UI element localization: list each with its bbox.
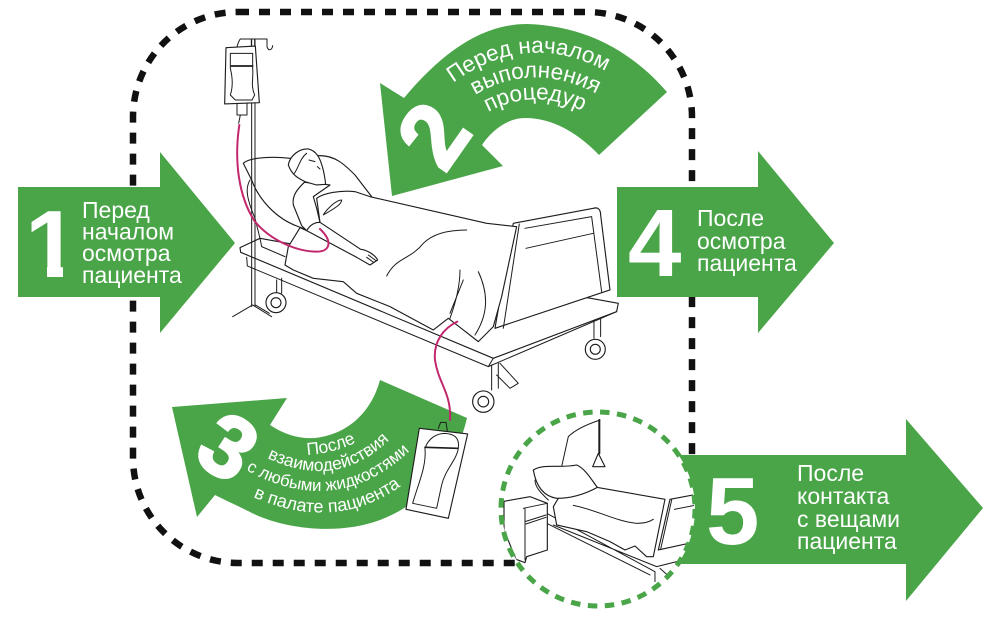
drainage bag [406,422,468,518]
urine tube [435,322,457,420]
arrow 3: after contact with body fluids: с любыми жидкостями [248,445,409,491]
label 5: с вещами [797,506,900,532]
IV pole [252,40,255,307]
pillow and headrest [243,156,372,238]
footboard [495,208,610,328]
number 2: 2 [377,85,490,186]
label 5: пациента [797,528,897,554]
label 1: Перед [82,197,150,223]
label 1: пациента [82,262,182,288]
green dashed ring [501,412,695,606]
number 1: 1 [25,191,78,298]
arrow 1: before examining the patient [18,152,235,333]
patient head [288,149,326,185]
inset: patient surroundings [501,412,697,606]
number 3: 3 [181,392,276,501]
arrow 2: before procedures: выполнения [470,66,600,94]
number 4: 4 [628,190,681,297]
label 3: После [307,435,354,455]
label 5: контакта [797,483,889,509]
label 4: пациента [697,250,797,276]
arrow 4: after examining the patient [617,151,834,333]
blanket [285,191,517,342]
patient torso and arm [293,182,378,265]
IV tube [237,125,328,252]
arrow 3: after contact with body fluids: в палате пациента [254,480,401,513]
number 5: 5 [706,458,759,565]
label 4: осмотра [697,228,786,254]
arrow 2: before procedures: процедур [484,87,586,112]
dashed zone boundary [133,12,692,563]
arrow 5: after contact with patient surroundings [660,419,983,601]
IV stand base [233,305,272,317]
empty bed and bedside table [504,420,697,583]
arrow 3: after contact with body fluids [172,380,467,529]
IV bag [225,39,273,123]
label 1: началом [82,218,174,244]
label 1: осмотра [82,240,171,266]
arrow 3: after contact with body fluids: взаимодействия [268,434,388,475]
label 5: После [797,460,864,486]
label 2: Перед началом [446,40,610,82]
label 4: После [697,205,764,231]
bed frame [240,238,618,412]
arrow 2: before procedures [377,24,667,196]
illustration: patient in bed [233,40,618,420]
